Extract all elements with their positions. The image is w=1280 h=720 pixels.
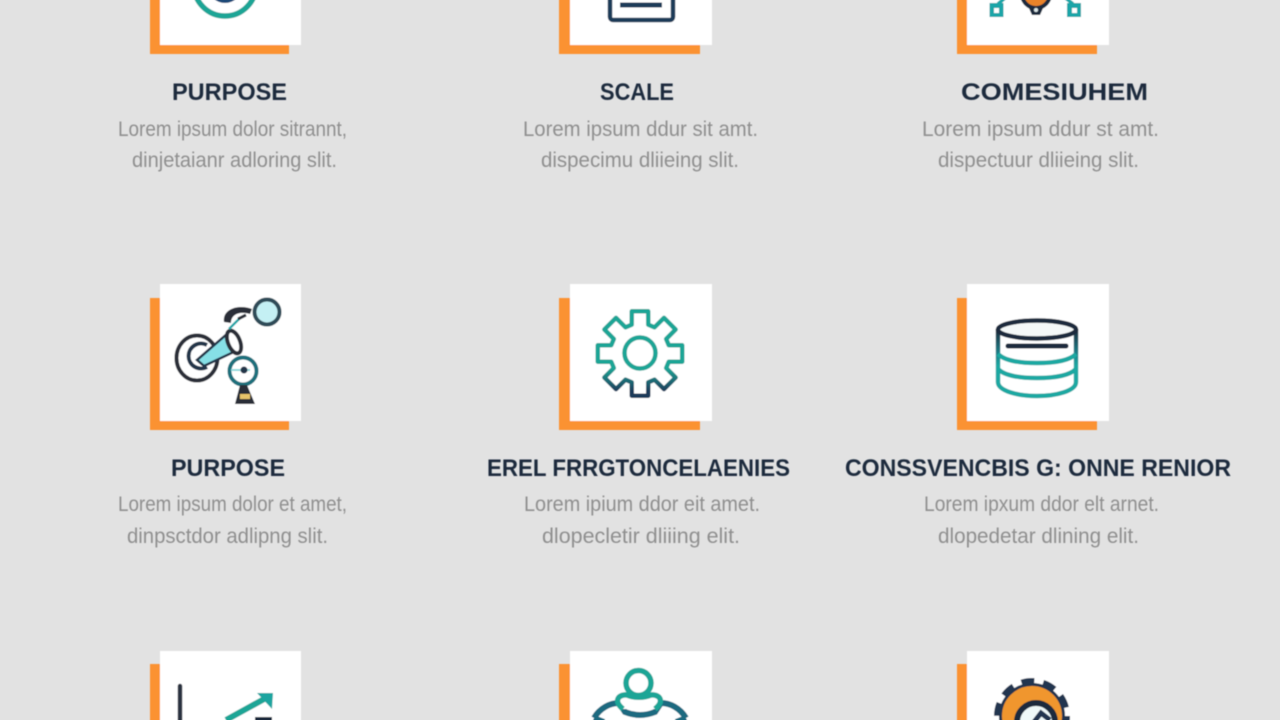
panel: consistency, row 2 right: [845, 284, 1231, 548]
description: [924, 493, 1159, 548]
panel: growth chart, row 3 left: [150, 651, 301, 720]
panel: purpose, row 1 left: [118, 0, 347, 172]
panel: comesiuhem, row 1 right: [922, 0, 1159, 172]
description: [523, 118, 758, 172]
description: [922, 118, 1159, 172]
description: dlopedetar dlining elit.: [938, 525, 1139, 548]
description: Lorem ipxum ddor elt arnet.: [924, 493, 1159, 516]
description: dispecimu dliieing slit.: [541, 149, 739, 172]
icon card: target: [150, 0, 301, 54]
description: Lorem ipium ddor eit amet.: [524, 493, 760, 516]
description: Lorem ipsum ddur sit amt.: [523, 118, 758, 141]
panel: settings, row 3 right: [957, 651, 1109, 720]
description: [524, 493, 760, 548]
description: dlopecletir dliiing elit.: [542, 525, 740, 548]
description: dinpsctdor adlipng slit.: [127, 525, 328, 548]
heading: SCALE: [600, 79, 674, 106]
heading: COMESIUHEM: [961, 79, 1148, 106]
icon card: gear: [559, 284, 712, 430]
panel: people, row 3 centre: [559, 651, 712, 720]
icon card: document: [559, 0, 712, 54]
description: Lorem ipsum ddur st amt.: [922, 118, 1159, 141]
heading: EREL FRRGTONCELAENIES: [487, 455, 790, 482]
icon card: orange gear: [957, 651, 1109, 720]
heading: CONSSVENCBIS G: ONNE RENIOR: [845, 455, 1231, 482]
heading: PURPOSE: [172, 79, 287, 106]
icon card: target and telescope: [150, 284, 301, 430]
description: [118, 493, 347, 548]
heading: PURPOSE: [171, 455, 285, 482]
icon card: network: [957, 0, 1109, 54]
description: Lorem ipsum dolor et amet,: [118, 493, 347, 516]
description: Lorem ipsum dolor sitrannt,: [118, 118, 347, 141]
icon card: person: [559, 651, 712, 720]
description: dinjetaianr adloring slit.: [132, 149, 337, 172]
description: dispectuur dliieing slit.: [938, 149, 1139, 172]
panel: purpose, row 2 left: [118, 284, 347, 548]
panel: efficiency, row 2 centre: [487, 284, 790, 548]
description: [118, 118, 347, 172]
icon card: database: [957, 284, 1109, 430]
panel: scale, row 1 centre: [523, 0, 758, 172]
icon card: chart arrow: [150, 651, 301, 720]
